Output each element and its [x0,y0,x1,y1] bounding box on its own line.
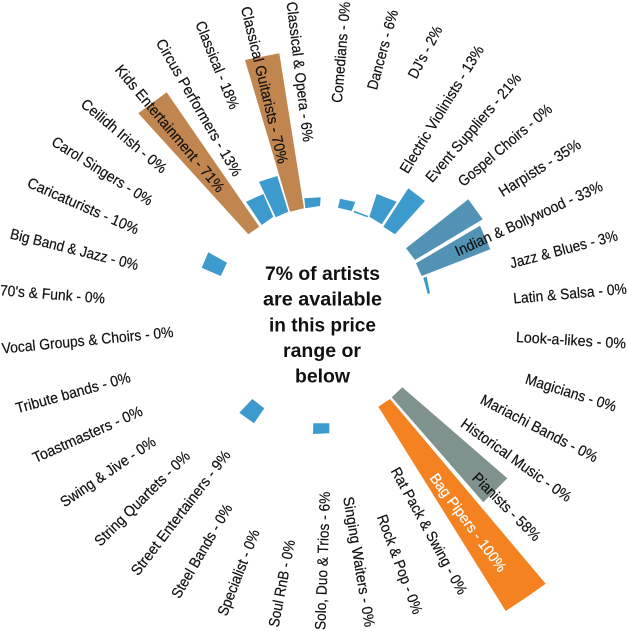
label: Jazz and Blues: Jazz & Blues - 3% [508,227,620,272]
label: Indian and Bollywood: Indian & Bollywood - 33% [452,178,606,260]
label: Carol Singers: Carol Singers - 0% [48,133,156,209]
label: Dancers: Dancers - 6% [364,8,402,92]
radial bars [138,53,546,611]
label: Specialist: Specialist - 0% [214,527,264,618]
bar: Classical and Opera 6% [304,197,321,208]
bar: Classical Guitarists 70% [245,53,304,212]
center statement: 7% of artists [265,264,380,285]
label: Street Entertainers: Street Entertainers - 9% [128,447,234,579]
label: Classical and Opera: Classical & Opera - 6% [283,1,316,143]
label: Classical: Classical - 18% [191,19,242,112]
label: Event Suppliers: Event Suppliers - 21% [422,70,525,186]
label: Soul RnB: Soul RnB - 0% [266,539,299,628]
label: Kids Entertainment: Kids Entertainment - 71% [111,62,228,196]
center statement: below [295,366,350,388]
bar: Circus Performers 13% [246,194,273,225]
bar: Classical 18% [259,176,288,217]
center statement: range or [283,341,362,362]
label: Ceilidh Irish: Ceilidh Irish - 0% [77,96,170,177]
label: Toastmasters: Toastmasters - 0% [30,403,145,467]
label: Magicians: Magicians - 0% [523,371,618,416]
bar: Kids Entertainment 71% [138,92,259,234]
bar: Jazz and Blues 3% [423,277,430,294]
label: Historical Music: Historical Music - 0% [457,415,575,506]
label: Caricaturists: Caricaturists - 10% [25,175,141,238]
label: Swing and Jive: Swing & Jive - 0% [57,433,159,511]
label: DJ's: DJ's - 2% [405,23,446,82]
label: Electric Violinists: Electric Violinists - 13% [397,43,488,177]
bar: Indian and Bollywood 33% [416,226,490,276]
label: Solo, Duo and Trios: Solo, Duo & Trios - 6% [312,491,334,630]
center statement [263,264,382,388]
bar: Solo, Duo and Trios 6% [313,423,329,434]
bar: Street Entertainers 9% [239,399,264,423]
label: Steel Bands: Steel Bands - 0% [168,501,236,601]
label: 70's and Funk: 70's & Funk - 0% [0,282,106,307]
label: Harpists: Harpists - 35% [496,136,584,201]
label: Gospel Choirs: Gospel Choirs - 0% [455,101,556,190]
label: Classical Guitarists: Classical Guitarists - 70% [237,5,291,165]
label: Circus Performers: Circus Performers - 13% [152,36,245,180]
label: Pianists: Pianists - 58% [468,470,544,545]
label: String Quartets: String Quartets - 0% [91,448,194,550]
label: Mariachi Bands: Mariachi Bands - 0% [477,391,601,466]
bar: Bag Pipers 100% [378,399,546,611]
bar: Harpists 35% [406,199,483,260]
label: Big Band and Jazz: Big Band & Jazz - 0% [8,226,140,274]
bar: Pianists 58% [392,387,507,502]
label: Rock and Pop: Rock & Pop - 0% [373,512,426,617]
center statement: are available [263,290,382,310]
bar: Dancers 6% [338,199,355,211]
bar: DJ's 2% [353,211,368,217]
label: Bag Pipers: Bag Pipers - 100% [426,470,510,575]
label: Vocal Groups and Choirs: Vocal Groups & Choirs - 0% [1,324,174,358]
bar: Caricaturists 10% [202,252,227,276]
label: Rat Pack and Swing: Rat Pack & Swing - 0% [387,465,470,598]
bar: Event Suppliers 21% [383,188,425,234]
label: Tribute bands: Tribute bands - 0% [14,369,132,417]
bar: Electric Violinists 13% [369,194,397,224]
center statement: in this price [269,316,376,336]
